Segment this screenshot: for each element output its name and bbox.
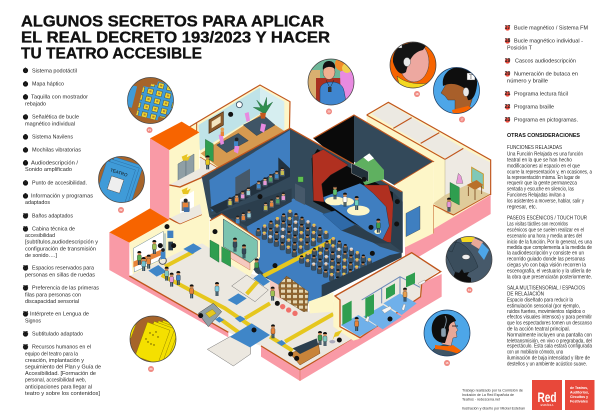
stage apron steps — [323, 211, 355, 231]
legend list: right column: Bucle magnético individual - — [514, 39, 583, 45]
text block: paseos escénicos — [507, 214, 592, 281]
text block: funciones relajadas: los asistentes a moverse, hablar, salir y — [507, 199, 584, 205]
red reference numbers for circles: 16 — [446, 361, 449, 365]
legend list: left column: 4 — [24, 114, 27, 120]
dressing room door — [450, 182, 459, 205]
legend list: right column — [505, 25, 588, 124]
logo: de teatros: Circuitos y — [570, 394, 589, 399]
side door — [295, 183, 305, 205]
dressing room mirror and desk — [467, 167, 483, 200]
legend list: left column: filas para personas con — [25, 292, 81, 298]
text block: sala multisensorial: SALA MULTISENSORIAL / ESPACIOS — [507, 286, 586, 292]
aisle — [263, 240, 333, 276]
title: EL REAL DECRETO 193/2023 Y HACER — [21, 30, 330, 46]
legend list: left column: Mapa háptico — [32, 82, 64, 88]
text block: funciones relajadas: Funciones Relajadas invitan a — [507, 193, 565, 199]
panel: dressing rooms — [367, 102, 491, 265]
text block: funciones relajadas: regresar, etc. — [507, 205, 537, 211]
elevators — [178, 154, 194, 252]
legend list: left column: Recursos humanos en el — [32, 345, 91, 351]
legend list: left column: adaptados — [25, 200, 50, 206]
legend list: left column: Punto de accesibilidad. — [32, 181, 87, 187]
red reference numbers for circles: 18 — [416, 92, 419, 96]
legend list: right column: Numeración de butaca en — [514, 72, 578, 78]
legend list: left column: 5 — [24, 134, 27, 140]
text block: sala multisensorial: destellos y un ambiente acústico suave. — [507, 362, 587, 368]
text block: funciones relajadas: ocurre la representación y, en ocasiones, a — [507, 170, 592, 176]
legend list: left column: rebajado — [25, 102, 46, 108]
legend list: left column: Audiodescripción / — [31, 161, 79, 167]
circle: numbered braille seats — [446, 236, 492, 282]
circle outline: easy reading programme — [98, 156, 144, 202]
legend list: left column: equipo del teatro para la — [25, 352, 78, 358]
legend list: right column: 23 — [505, 117, 510, 123]
red reference numbers for circles: 17 — [461, 118, 464, 122]
credits: Inclusión de La Red Española de — [462, 392, 514, 397]
magnetic loop signs — [182, 154, 191, 228]
legend list: left column — [23, 68, 101, 397]
text block: sala multisensorial: efectos visuales intensos) y para permitir — [507, 315, 592, 321]
legend list: left column: Información y programas — [31, 194, 93, 200]
legend list: left column: 2 — [24, 81, 27, 87]
legend list: left column: 10 — [23, 213, 28, 219]
logo: La Red — [532, 380, 562, 410]
circle: easy reading programme — [98, 156, 144, 202]
circle: T position boy — [434, 68, 480, 114]
text block: sala multisensorial: DE RELAJACIÓN — [507, 291, 544, 298]
text block: funciones relajadas — [507, 145, 592, 211]
legend list: left column: discapacidad sensorial — [25, 299, 79, 305]
red reference numbers for circles: 19 — [468, 288, 471, 292]
circle: braille programme — [130, 316, 176, 362]
credits: Teatros · redescena.net — [462, 396, 501, 402]
auditorium door — [235, 169, 250, 197]
text block: sala multisensorial: de la acción teatral principal. — [507, 327, 570, 333]
text block: sala multisensorial: que los espectadores tomen un descanso — [507, 321, 592, 327]
stage curtains — [312, 149, 348, 202]
legend list: left column: Sonido amplificado — [25, 167, 72, 173]
balcony lower — [210, 188, 292, 227]
legend list: left column: 8 — [24, 180, 27, 186]
text block: sala multisensorial: Normalmente incluyen una pantalla con — [507, 333, 592, 339]
legend list: left column: configuración de transmisión — [25, 246, 96, 252]
legend list: right column: 19 — [505, 58, 510, 64]
text block: paseos escénicos: medida que complementa a la medida de — [507, 245, 592, 251]
legend list: left column: 14 — [23, 311, 28, 317]
balcony upper — [210, 157, 290, 213]
legend list: right column: Programa en pictogramas. — [514, 118, 578, 124]
legend list: left column: Sistema Navilens — [32, 135, 73, 141]
text block: paseos escénicos: inicio de la función. Por lo general, es una — [507, 240, 592, 246]
text block: funciones relajadas: teatral en la que se han hecho — [507, 158, 572, 164]
stage actors — [325, 185, 381, 234]
circle outline: pictogram programme — [128, 78, 174, 124]
person in wheelchair upper floor — [182, 199, 190, 212]
legend list: left column: 16 — [23, 344, 28, 350]
stage front slope — [342, 225, 390, 243]
panel: auditorium — [202, 128, 403, 303]
legend list: left column: 6 — [24, 147, 27, 153]
circle: front row audience member — [308, 59, 354, 105]
legend list: right column: Cascos audiodescripción — [515, 59, 576, 65]
panel: lobby floor — [129, 243, 360, 372]
circle outline: numbered braille seats — [446, 236, 492, 282]
text block: sala multisensorial: iluminación de baja intensidad y libre de — [507, 356, 590, 362]
navilens panel — [165, 231, 173, 262]
credits — [462, 388, 525, 410]
sensory room floors — [341, 293, 417, 337]
legend list: left column: teatro y sobre los contenidos] — [25, 391, 101, 397]
logo: de teatros: Festivales — [570, 398, 589, 404]
circle: audio description headset — [424, 310, 470, 356]
lobby people — [137, 155, 275, 338]
legend list: left column: 13 — [23, 285, 28, 291]
legend list: left column: Mochilas vibratorias — [32, 148, 81, 154]
wall clock and chart — [209, 102, 242, 133]
text block: funciones relajadas: sentada y escuche en silencio, las — [507, 187, 574, 193]
vibrating backpacks table — [290, 338, 320, 365]
title: TU TEATRO ACCESIBLE — [21, 46, 202, 62]
legend list: left column: Sistema podotáctil — [32, 68, 77, 74]
legend list: right column: Bucle magnético / Sistema FM — [514, 26, 588, 32]
red reference numbers for circles: 23 — [150, 367, 153, 371]
text block: paseos escénicos: escenario una hora y media antes del — [507, 234, 582, 240]
circle outline: hearing aid woman — [390, 42, 436, 88]
red reference numbers for circles: 20 — [328, 110, 331, 114]
text block: paseos escénicos: PASEOS ESCÉNICOS / TOUCH TOUR — [507, 214, 587, 222]
legend list: left column: Preferencia de las primeras — [32, 286, 99, 292]
credits: Ilustración y diseño por Mickel Esteban — [462, 406, 525, 410]
text block: sala multisensorial: ruidos fuertes, movimientos rápidos o — [507, 309, 585, 315]
circle: hearing aid woman — [390, 42, 436, 88]
stage right wall strip — [391, 192, 403, 253]
curved front wall of stalls — [322, 253, 402, 297]
panel: walkway and tower — [150, 122, 222, 257]
text block: funciones relajadas: Una Función Relajada es una función — [507, 152, 583, 158]
legend list: left column: seguimiento del Plan y Guía de — [25, 365, 101, 371]
text block: sala multisensorial: espectáculo. Esta sala estará configurada — [507, 344, 592, 350]
legend list: left column: Taquilla con mostrador — [31, 95, 88, 101]
text block: paseos escénicos: ciegas y/o con baja visión recorren la — [507, 263, 586, 269]
text block: paseos escénicos: la obra que presenciarán posteriormente. — [507, 275, 592, 281]
circle outline: audio description headset — [424, 310, 470, 356]
audience block upper — [256, 210, 328, 257]
text block: paseos escénicos: recorrido guiado donde las personas — [507, 257, 585, 263]
logo: La Red: Red — [538, 389, 556, 405]
legend list: left column: accesibilidad — [25, 233, 55, 239]
circle: pictogram programme — [128, 78, 174, 124]
circle: easy reading programme: TEATRO — [110, 167, 129, 178]
title: ALGUNOS SECRETOS PARA APLICAR — [21, 14, 324, 30]
legend list: right column: número y braille — [507, 79, 548, 85]
panel: pink outer walls right — [261, 274, 442, 381]
legend list: left column: 15 — [23, 331, 28, 337]
meeting room door — [205, 139, 213, 162]
circle outline: T position boy — [434, 68, 480, 114]
text block: sala multisensorial — [507, 286, 592, 368]
legend list: left column: personal, accesibilidad web, — [25, 378, 86, 384]
panel: meeting room — [182, 85, 290, 176]
legend list: left column: anticipaciones para llegar al — [25, 384, 92, 390]
legend list: right column: Programa lectura fácil — [514, 92, 568, 98]
text block: sala multisensorial: con un mobiliario cómodo, una — [507, 350, 563, 356]
legend list: left column: 9 — [24, 193, 27, 199]
legend list: left column: magnético individual — [25, 122, 75, 128]
costume on hanger — [456, 173, 463, 183]
legend list: left column: Accesibilidad. [Formación de — [25, 371, 96, 377]
text block: paseos escénicos: la audiodescripción y consiste en un — [507, 251, 584, 257]
legend list: left column: Signos — [25, 319, 41, 325]
legend list: left column: 1 — [24, 68, 27, 74]
legend list: left column: Subtitulado adaptado — [32, 332, 83, 338]
legend list: left column: 7 — [24, 160, 27, 166]
legend list: right column: 22 — [505, 104, 510, 110]
text block: sala multisensorial: Espacio diseñado para reducir la — [507, 298, 573, 304]
legend list: left column: 12 — [23, 265, 28, 271]
scenery mountain — [353, 153, 384, 185]
haptic map — [198, 303, 222, 327]
plant — [253, 97, 273, 119]
legend list: left column: Baños adaptados — [32, 214, 73, 220]
logo: de teatros — [565, 380, 594, 410]
blue tactile tiles — [148, 243, 286, 347]
circle outline: front row audience member — [308, 59, 354, 105]
legend list: left column: Cabina técnica de — [32, 227, 75, 233]
sensory room occupants — [355, 288, 407, 331]
text block: funciones relajadas: FUNCIONES RELAJADAS — [507, 145, 563, 151]
meeting tables and chairs — [217, 112, 275, 154]
circle: T position boy: T — [469, 75, 473, 81]
panel: stage tower — [313, 115, 433, 247]
theatre isometric cutaway — [109, 85, 491, 381]
tactile path — [162, 252, 333, 351]
legend list: right column: 21 — [505, 91, 510, 97]
text block: sala multisensorial: estimulación sensorial (por ejemplo, — [507, 304, 580, 310]
red reference numbers for circles: 22 — [120, 208, 123, 212]
legend list: left column: de sonido….] — [25, 253, 58, 259]
legend list: left column: creación, implantación y — [25, 358, 84, 364]
red reference numbers for circles — [118, 91, 472, 372]
stalls floor — [247, 198, 402, 302]
legend list: left column: 11 — [23, 226, 28, 232]
legend list: left column: Espacios reservados para — [32, 266, 94, 272]
legend list: right column: 17 — [505, 25, 510, 31]
balcony audience — [227, 167, 286, 225]
circle outline: braille programme — [130, 316, 176, 362]
restroom fixtures — [365, 280, 426, 322]
panel: restrooms — [333, 253, 441, 341]
red seat markers — [280, 304, 298, 316]
legend list: right column: 20 — [505, 71, 510, 77]
text block: paseos escénicos: escénicos que se suelen realizar en el — [507, 228, 584, 234]
text block: sala multisensorial: teletransmisión, en vivo o pregrabada, del — [507, 339, 592, 345]
text block: funciones relajadas: la representación misma. En lugar de — [507, 175, 580, 181]
tactile model shelf — [270, 276, 333, 313]
legend list: left column: 3 — [24, 94, 27, 100]
costumed actor — [447, 198, 451, 212]
logo: de teatros: de Teatros, — [570, 385, 588, 390]
entrance ramps — [207, 275, 268, 366]
legend list: right column: 18 — [505, 38, 510, 44]
text block: paseos escénicos: Las visitas táctiles son recorridos — [507, 222, 568, 228]
logo: de teatros: Auditorios, — [570, 390, 589, 394]
stage opening — [312, 149, 402, 243]
projection screen — [352, 163, 368, 182]
legend list: left column: Intérprete en Lengua de — [30, 312, 89, 318]
text block: funciones relajadas: modificaciones al espacio en el que — [507, 164, 580, 170]
panel: lobby walls — [109, 208, 228, 337]
credits: Trabajo realizado por la Comisión de — [462, 388, 523, 392]
number badges on illustration — [158, 112, 400, 361]
title — [21, 14, 330, 62]
text block: funciones relajadas: requerir que la gente permanezca — [507, 181, 577, 187]
legend list: left column: [subtítulos,audiodescripción y — [25, 240, 98, 246]
audience block lower — [299, 237, 372, 284]
red reference numbers for circles: 21 — [148, 128, 151, 132]
upper floor landings — [169, 168, 202, 224]
exit sign — [298, 177, 303, 182]
heading: otras consideraciones: OTRAS CONSIDERACIONES — [507, 133, 581, 139]
legend list: right column: Programa braille — [514, 105, 554, 111]
text block: paseos escénicos: escenografía, el vestuario y la utilería de — [507, 269, 591, 275]
loop sign and staff — [318, 330, 342, 346]
logo: La Red: ESPAÑOLA — [541, 404, 554, 407]
legend list: right column: Posición T — [507, 46, 532, 52]
restroom green doors — [342, 272, 415, 325]
legend list: left column: Señalética de bucle — [32, 115, 79, 121]
legend list: left column: personas en sillas de ruedas — [25, 273, 95, 279]
control booth — [210, 214, 260, 277]
